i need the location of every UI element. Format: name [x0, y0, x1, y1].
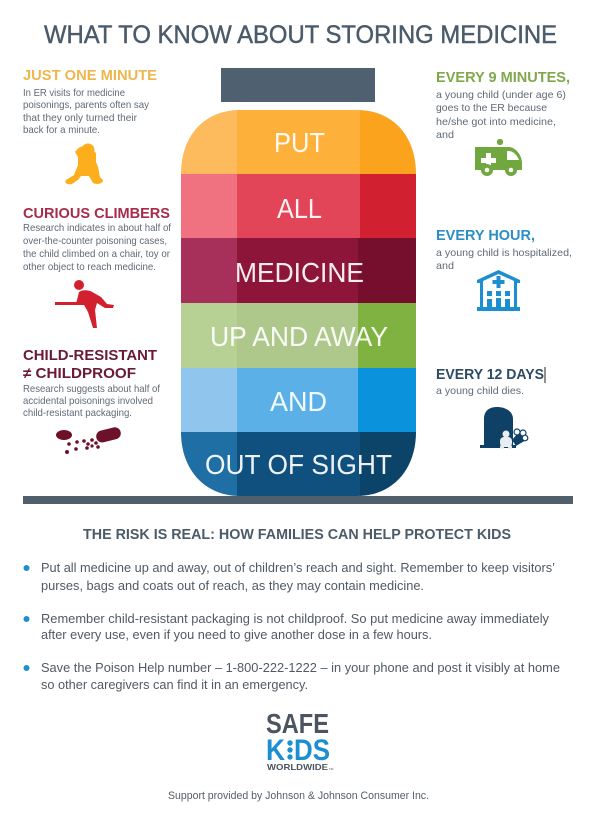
panel: every hour — [436, 227, 572, 311]
heading: child-resistant — [23, 347, 157, 382]
logo: safe kids worldwide: TM — [329, 767, 334, 771]
text: curious climbers: the child climbed on a chair, toy or — [23, 248, 170, 260]
jar cap — [221, 68, 375, 102]
heading: every 9 minutes: EVERY 9 MINUTES, — [436, 69, 570, 86]
jar words: ALL — [277, 193, 322, 224]
footer: support credit: Support provided by Johnson & Johnson Consumer Inc. — [168, 790, 429, 802]
text: just one minute — [23, 87, 150, 136]
text: curious climbers: Research indicates in about half of — [23, 222, 171, 234]
text: every 9 minutes: and — [436, 129, 454, 141]
logo: safe kids worldwide: K — [266, 734, 285, 767]
icon: climbing child — [55, 280, 114, 328]
panel: curious climbers — [23, 205, 171, 328]
tip 3: Save the Poison Help number – 1-800-222-1222 – in your phone and post it visibly at home — [41, 660, 560, 675]
jar body bands — [181, 109, 417, 497]
jar words: MEDICINE — [235, 257, 364, 288]
text: every 9 minutes — [436, 89, 566, 141]
heading: curious climbers: CURIOUS CLIMBERS — [23, 205, 170, 222]
logo: safe kids worldwide: SAFE — [266, 708, 329, 739]
panel: just one minute — [23, 67, 157, 184]
tip 3: so other caregivers can find it in an emergency. — [41, 677, 308, 692]
text: child-resistant: child-resistant packaging. — [23, 407, 132, 419]
icon: crouching child — [65, 144, 103, 184]
text: just one minute: In ER visits for medicine — [23, 87, 125, 99]
tip 2: after every use, even if you need to give another dose in a few hours. — [41, 627, 432, 642]
logo: safe kids worldwide: DS — [294, 734, 330, 767]
list: safety tips — [24, 560, 560, 692]
tip 2: Remember child-resistant packaging is not childproof. So put medicine away immediately — [41, 611, 549, 626]
jar words: PUT — [274, 127, 325, 158]
text: every 9 minutes: goes to the ER because — [436, 102, 547, 114]
heading: the risk is real: THE RISK IS REAL: HOW FAMILIES CAN HELP PROTECT KIDS — [83, 527, 511, 543]
jar words: AND — [270, 386, 327, 417]
text cursor — [544, 367, 546, 383]
heading: child-resistant: CHILD-RESISTANT — [23, 347, 157, 364]
text: just one minute: that they only turned their — [23, 112, 137, 124]
text: just one minute: back for a minute. — [23, 124, 100, 136]
text: every hour: and — [436, 260, 454, 272]
tip 1 — [24, 560, 555, 593]
icon: ambulance — [475, 139, 522, 176]
text: curious climbers: other object to reach medicine. — [23, 261, 156, 273]
heading: child-resistant: ≠ CHILDPROOF — [23, 365, 136, 382]
text: child-resistant: accidental poisonings involved — [23, 395, 153, 407]
text: every 9 minutes: a young child (under age 6) — [436, 89, 566, 101]
illustration: medicine jar — [181, 68, 417, 497]
logo: safe kids worldwide: WORLDWIDE — [267, 762, 328, 772]
text: every 9 minutes: he/she got into medicine, — [436, 116, 556, 128]
jar words: OUT OF SIGHT — [205, 449, 392, 480]
jar words — [205, 127, 392, 480]
tip 3 — [24, 660, 560, 692]
text: curious climbers: over-the-counter poisoning cases, — [23, 235, 167, 247]
icon: spilled pills — [56, 426, 122, 454]
tip 1: Put all medicine up and away, out of children’s reach and sight. Remember to keep visitors’ — [41, 560, 555, 575]
logo: safe kids worldwide — [266, 708, 334, 772]
text: curious climbers — [23, 222, 171, 273]
text: every 12 days: a young child dies. — [436, 385, 524, 397]
text: child-resistant: Research suggests about half of — [23, 383, 160, 395]
tip 2 — [24, 611, 549, 642]
panel: every 12 days — [436, 366, 546, 449]
text: child-resistant — [23, 383, 160, 419]
tip 1: purses, bags and coats out of reach, as they may contain medicine. — [41, 578, 424, 593]
text: every hour — [436, 247, 572, 272]
panel: child-resistant — [23, 347, 160, 454]
panel: every 9 minutes — [436, 69, 570, 176]
icon: gravestone with teddy bear — [480, 407, 528, 449]
heading: every 12 days: EVERY 12 DAYS — [436, 366, 544, 383]
title: WHAT TO KNOW ABOUT STORING MEDICINE — [44, 21, 557, 49]
heading: every hour: EVERY HOUR, — [436, 227, 535, 244]
shelf — [23, 496, 573, 504]
icon: hospital — [477, 270, 520, 311]
text: just one minute: poisonings, parents often say — [23, 99, 150, 111]
text: every hour: a young child is hospitalized, — [436, 247, 572, 259]
heading: just one minute: JUST ONE MINUTE — [23, 67, 157, 84]
jar words: UP AND AWAY — [210, 321, 388, 352]
